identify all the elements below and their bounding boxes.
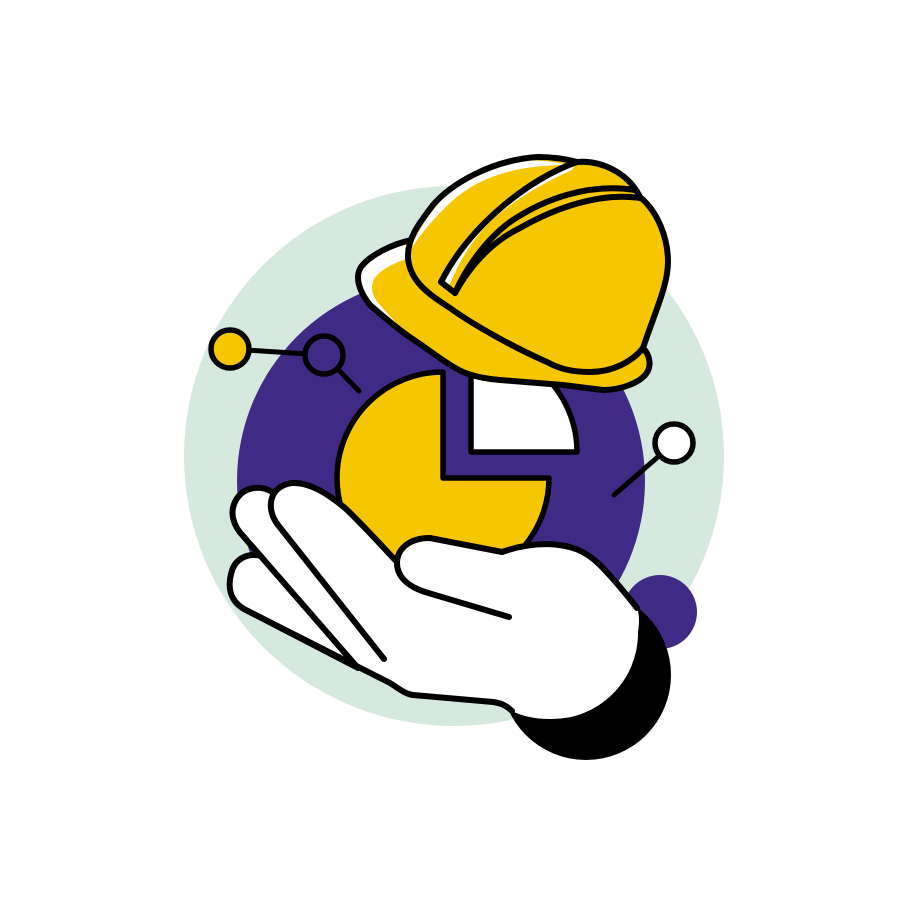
visor outlines	[441, 162, 640, 293]
small purple circle	[623, 575, 697, 649]
brim outline	[358, 240, 650, 390]
background circle: purple	[237, 277, 645, 685]
visor strip highlight	[443, 163, 577, 286]
node connector: left	[211, 330, 359, 391]
ring finger outline	[233, 488, 358, 668]
node connector: right	[614, 424, 693, 495]
pie slice: yellow	[337, 372, 549, 584]
hat dome fill	[408, 157, 668, 372]
thumb outline	[397, 538, 637, 617]
brim yellow fill	[372, 258, 650, 390]
wrist outline	[244, 609, 512, 711]
little finger	[230, 555, 358, 668]
hand	[230, 483, 639, 719]
ring finger	[233, 488, 384, 668]
black circle shadow	[501, 590, 671, 760]
pie slice: white	[471, 346, 577, 452]
visor middle line	[455, 188, 635, 293]
hand outlines	[233, 483, 637, 711]
dome outline	[408, 157, 668, 372]
dome highlight	[409, 160, 568, 252]
visor lower line	[455, 197, 640, 293]
middle finger outline	[271, 483, 397, 659]
hard hat	[358, 157, 668, 390]
hat brim fill	[358, 240, 650, 390]
visor upper edge	[441, 162, 577, 293]
pie chart	[337, 346, 577, 584]
palm and fingers fill	[271, 483, 639, 719]
background circle: pale green	[184, 186, 724, 726]
